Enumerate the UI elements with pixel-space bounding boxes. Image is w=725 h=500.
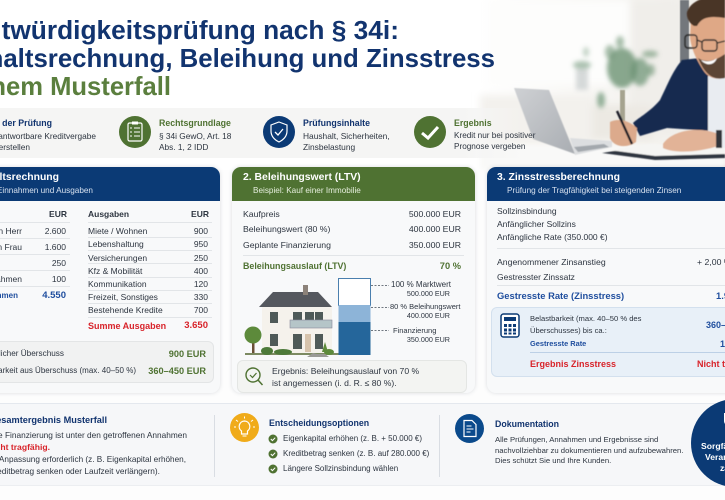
bar labels: 400.000 EUR (407, 311, 450, 320)
expenses table: Ausgaben (88, 209, 129, 219)
icon: shield (263, 116, 295, 148)
strip item: contents: Zinsbelastung (303, 142, 355, 152)
stress result box: Überschusses) bis ca.: (530, 326, 607, 335)
result box (237, 360, 467, 393)
strip item: legal basis: Rechtsgrundlage (159, 118, 231, 128)
laptop (514, 88, 575, 154)
panel header: Beispiel: Kauf einer Immobilie (253, 186, 361, 195)
expenses table: EUR (191, 209, 209, 219)
decision options (268, 418, 429, 474)
expenses table: Kommunikation (88, 279, 147, 289)
documentation: Dies schützt Sie und Ihre Kunden. (495, 456, 611, 465)
expenses table: 250 (194, 252, 208, 262)
strip item: contents (303, 118, 390, 152)
expenses table: 400 (194, 266, 208, 276)
strip item: contents: Prüfungsinhalte (303, 118, 370, 128)
bar labels: 350.000 EUR (407, 335, 450, 344)
bar labels (390, 280, 460, 344)
hero photo: man at laptop (480, 0, 725, 167)
stress result box (491, 307, 725, 377)
expenses table: Summe Ausgaben (88, 321, 166, 331)
icon: magnifier check (245, 367, 263, 386)
expenses table: Miete / Wohnen (88, 226, 147, 236)
strip item: goal (0, 118, 96, 152)
title (0, 15, 495, 101)
documentation: Dokumentation (495, 419, 559, 429)
stress result box: Gestresste Rate (530, 339, 586, 348)
hands and pen (610, 120, 637, 146)
expenses table: Versicherungen (88, 252, 147, 262)
icon: badge shield (724, 413, 725, 424)
strip item: result: Ergebnis (454, 118, 492, 128)
value rows: Kaufpreis (243, 209, 280, 219)
icon: document (455, 414, 484, 443)
surplus box: 360–450 EUR (148, 366, 206, 376)
rate rows: Sollzinsbindung (497, 206, 557, 216)
panel header: 2. Beleihungswert (LTV) (243, 172, 361, 183)
table (480, 146, 725, 170)
icon: option checks (268, 434, 278, 474)
value rows: 400.000 EUR (409, 224, 461, 234)
icon: check (414, 116, 446, 148)
strip item: contents: Haushalt, Sicherheiten, (303, 131, 390, 141)
expenses table: 900 (194, 226, 208, 236)
icon: house illustration (244, 285, 338, 357)
badge: careful responsibility (691, 399, 725, 487)
rate rows: Gestresste Rate (Zinsstress) (497, 290, 624, 301)
panel header (0, 167, 220, 201)
rate rows: Anfänglicher Sollzins (497, 219, 576, 229)
income table: 100 (52, 274, 66, 284)
panel header: 3. Zinsstressberechnung (497, 172, 620, 183)
value rows: 70 % (440, 261, 461, 271)
strip item: result: Prognose vergeben (454, 142, 525, 151)
overall result (0, 415, 187, 476)
icon: calculator (500, 313, 520, 338)
value rows: 500.000 EUR (409, 209, 461, 219)
bar labels: 100 % Marktwert (391, 280, 451, 289)
strip item: result (454, 118, 536, 151)
panel header (232, 167, 475, 201)
income table: 1.600 (45, 242, 66, 252)
expenses table: 950 (194, 239, 208, 249)
value rows: Geplante Finanzierung (243, 240, 331, 250)
panel: household budget (0, 167, 220, 393)
documentation: Alle Prüfungen, Annahmen und Ergebnisse sind (495, 435, 658, 444)
expenses table: 330 (194, 292, 208, 302)
icon: clipboard (119, 116, 151, 148)
value rows: Beleihungsauslauf (LTV) (243, 261, 346, 271)
stacked LTV bar (338, 278, 389, 355)
value rows: 350.000 EUR (409, 240, 461, 250)
rate rows (497, 206, 725, 301)
expenses table: 700 (194, 305, 208, 315)
bar labels: 500.000 EUR (407, 289, 450, 298)
stress result box: Ergebnis Zinsstress (530, 359, 616, 369)
expenses table: 3.650 (184, 320, 208, 331)
income table: 250 (52, 258, 66, 268)
income table: 4.550 (42, 290, 66, 301)
panel header (487, 167, 725, 201)
surplus box: 900 EUR (169, 349, 206, 359)
decision options: Entscheidungsoptionen (269, 418, 369, 428)
decision options: Längere Sollzinsbindung wählen (283, 464, 398, 473)
decision options: Eigenkapital erhöhen (z. B. + 50.000 €) (283, 434, 422, 443)
strip item: legal basis (159, 118, 231, 152)
rate rows: Anfängliche Rate (350.000 €) (497, 232, 608, 242)
expenses table: Kfz & Mobilität (88, 266, 142, 276)
expenses table: Bestehende Kredite (88, 305, 163, 315)
bar labels: 80 % Beleihungswert (390, 302, 460, 311)
jacket (633, 58, 725, 136)
strip item: legal basis: § 34i GewO, Art. 18 (159, 131, 231, 141)
panel: interest stress (487, 167, 725, 393)
expenses table: 120 (194, 279, 208, 289)
shirt (708, 74, 725, 150)
documentation: nachvollziehbar zu dokumentieren und aufzubewahren. (495, 446, 683, 455)
rate rows: Gestresster Zinssatz (497, 272, 575, 282)
expenses table (88, 209, 212, 331)
bar labels: Finanzierung (393, 326, 436, 335)
strip item: result: Kredit nur bei positiver (454, 131, 535, 140)
rate rows: Angenommener Zinsanstieg (497, 257, 606, 267)
result box: ist angemessen (i. d. R. ≤ 80 %). (272, 378, 397, 388)
info strip (0, 108, 725, 158)
expenses table: Lebenshaltung (88, 239, 144, 249)
expenses table: Freizeit, Sonstiges (88, 292, 158, 302)
income table: 2.600 (45, 226, 66, 236)
stress result box: Belastbarkeit (max. 40–50 % des (530, 314, 641, 323)
panel header: Prüfung der Tragfähigkeit bei steigenden Zinsen (507, 186, 681, 195)
documentation (495, 419, 683, 465)
decision options: Kreditbetrag senken (z. B. auf 280.000 €) (283, 449, 429, 458)
plant (573, 36, 658, 108)
notebook (602, 145, 725, 160)
value rows (243, 209, 464, 271)
head (690, 14, 725, 79)
value rows: Beleihungswert (80 %) (243, 224, 330, 234)
panel: loan to value (232, 167, 475, 393)
surplus box (0, 341, 214, 383)
income table: EUR (49, 209, 67, 219)
strip item: legal basis: Abs. 1, 2 IDD (159, 142, 208, 152)
bottom strip (0, 403, 725, 486)
income table (0, 209, 70, 301)
result box: Ergebnis: Beleihungsauslauf von 70 % (272, 366, 419, 376)
icon: light bulb (230, 413, 259, 442)
